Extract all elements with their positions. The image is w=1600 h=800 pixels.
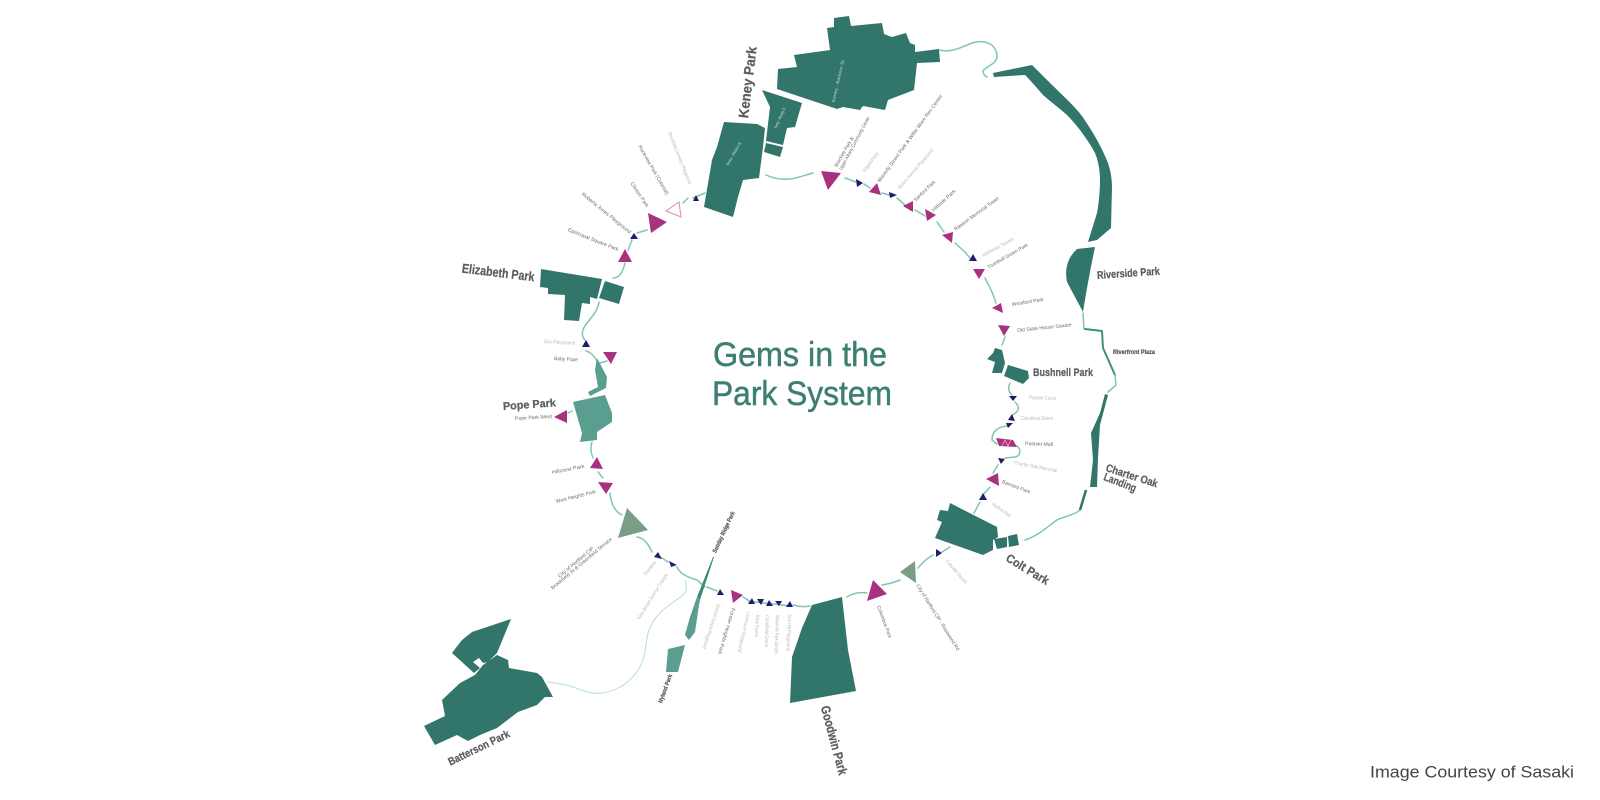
- small site labels: Wawarme Park Garden: [773, 615, 780, 654]
- small site labels: Pope Park West: [515, 414, 553, 422]
- park: Pope Park upper: [588, 358, 607, 396]
- Pulaski Mall hatch marks: [1002, 440, 1011, 446]
- heading: Charter Oak Landing: Charter Oak: [1104, 462, 1160, 491]
- small site labels: Rawson Memorial Tower: [953, 196, 1001, 232]
- label: Keney Windsor: Keney - Windsor St: [725, 141, 742, 166]
- park: Keney main: [704, 122, 765, 217]
- small site labels: Roberta Jones Playground: [580, 192, 632, 235]
- small site labels: New Britain Avenue Triangle: [636, 572, 670, 621]
- label: Keney - Barbour St: Keney - Barbour St: [831, 58, 845, 103]
- heading: Riverside Park: Riverside Park: [1097, 266, 1161, 282]
- small site labels: Clinton Park: [629, 181, 650, 209]
- small site labels: Northeast Square: [982, 236, 1015, 259]
- park: Colt Park: [935, 503, 1019, 555]
- park: Nyland Park: [666, 645, 685, 672]
- heading: Elizabeth Park: Elizabeth Park: [461, 261, 536, 284]
- small site labels: Forster Heights Park: [716, 607, 736, 655]
- park: Goodwin Park: [790, 597, 856, 703]
- park: Batterson Park: [424, 619, 553, 745]
- small site labels: Charter Oak Memorial: [1013, 460, 1058, 474]
- small site labels: Old State House Square: [1017, 322, 1072, 334]
- gem markers: navy triangles: [582, 179, 1017, 607]
- small site labels: Hartford Park: [990, 502, 1012, 519]
- small site labels: Rockview Park (Colonial): [636, 144, 670, 196]
- small site labels: Sisson Avenue Playground: [897, 148, 935, 191]
- small site labels: Brookfield St & Greenfield Terrace: [550, 536, 614, 591]
- park: Elizabeth Park west: [540, 269, 602, 321]
- small site labels: Sigourney: [862, 150, 881, 174]
- gem markers: sage triangles: [618, 508, 916, 583]
- heading: Pope Park: Pope Park: [503, 397, 557, 413]
- gem marker: outlined pink triangle: [666, 202, 681, 217]
- small site labels: Columbus Green: [1021, 416, 1053, 422]
- park: Charter Oak Landing: [1080, 394, 1108, 510]
- small site labels: Brookfield Cemetery Playground: [666, 132, 692, 185]
- title: Gems in the: [713, 336, 887, 374]
- title: [712, 336, 892, 413]
- small site labels: Day Playground: [544, 339, 575, 347]
- small site labels: Hillcrest Park: [551, 464, 586, 476]
- small site labels: Trumbull Green Park: [986, 242, 1030, 271]
- park: Keney - Barbour St: [777, 16, 940, 110]
- park: Riverside north: [993, 65, 1112, 242]
- heading: Bushnell Park: Bushnell Park: [1033, 367, 1094, 379]
- heading: Keney Park: Keney Park: [735, 45, 760, 119]
- heading: Goodwin Park: Goodwin Park: [818, 704, 851, 777]
- heading: Sunday Ridge Park: Sunday Ridge Park: [712, 510, 737, 554]
- light trail to Batterson Park: [547, 580, 686, 693]
- small site labels: City of Hartford CIP - Rosewood Rd: [914, 583, 960, 652]
- park system diagram: [424, 16, 1161, 777]
- small site labels: Brackett Park &: [833, 135, 856, 168]
- small site labels: Waverly Street Park & Willie Ware Rec Center: [877, 93, 945, 184]
- heading: Colt Park: Colt Park: [1003, 551, 1052, 588]
- heading: Riverfront Plaza: Riverfront Plaza: [1113, 350, 1156, 356]
- park: Keney - Waverly St: [762, 90, 802, 157]
- small site labels: [515, 93, 1072, 655]
- image credit: Image Courtesy of Sasaki: [1370, 762, 1574, 782]
- small site labels: Kenneth Forster Playground: [701, 603, 721, 650]
- small site labels: Linnmoore Playground: [736, 611, 751, 653]
- small site labels: West Heights Park: [555, 489, 597, 505]
- small site labels: Sanford Park: [913, 179, 938, 203]
- heading: Batterson Park: Batterson Park: [446, 728, 513, 768]
- heading: Charter Oak Landing: Landing: [1102, 471, 1138, 495]
- river trail lines: [568, 42, 1116, 607]
- park: Bushnell Park: [987, 348, 1029, 384]
- small site labels: Baby Pope: [554, 356, 578, 363]
- small site labels: Gardens: [643, 560, 659, 577]
- small site labels: Campfield Green: [763, 615, 770, 647]
- small site labels: Westford Park: [1012, 297, 1045, 308]
- park: Sunday Ridge Park: [685, 557, 714, 640]
- small site labels: Zion Hill Playground: [785, 614, 792, 651]
- small site labels: Upper Albany Community Center: [838, 115, 872, 171]
- park: Elizabeth Park east: [599, 281, 624, 304]
- small site labels: Hillside Park: [931, 188, 958, 213]
- small site labels: Barry Square: [753, 615, 760, 637]
- small site labels: City of Hartford CIP: [557, 545, 596, 579]
- gem markers: magenta triangles: [554, 171, 1017, 603]
- small site labels: Pulaski Circle: [1029, 395, 1056, 402]
- small site labels: Pulaski Mall: [1025, 441, 1053, 448]
- small site labels: Barnard Park: [1001, 479, 1032, 496]
- heading: Nyland Park: Nyland Park: [658, 673, 674, 704]
- title: Park System: [712, 375, 892, 413]
- park: Pope Park main: [573, 395, 612, 442]
- small site labels: Coltsville Square: [944, 559, 968, 585]
- park: Riverside south: [1066, 247, 1095, 312]
- small site labels: Episcopal Square Park: [567, 227, 620, 253]
- label: Keney - Waverly St: Keney - Waverly St: [773, 106, 787, 129]
- small site labels: Columbus Park: [875, 605, 893, 639]
